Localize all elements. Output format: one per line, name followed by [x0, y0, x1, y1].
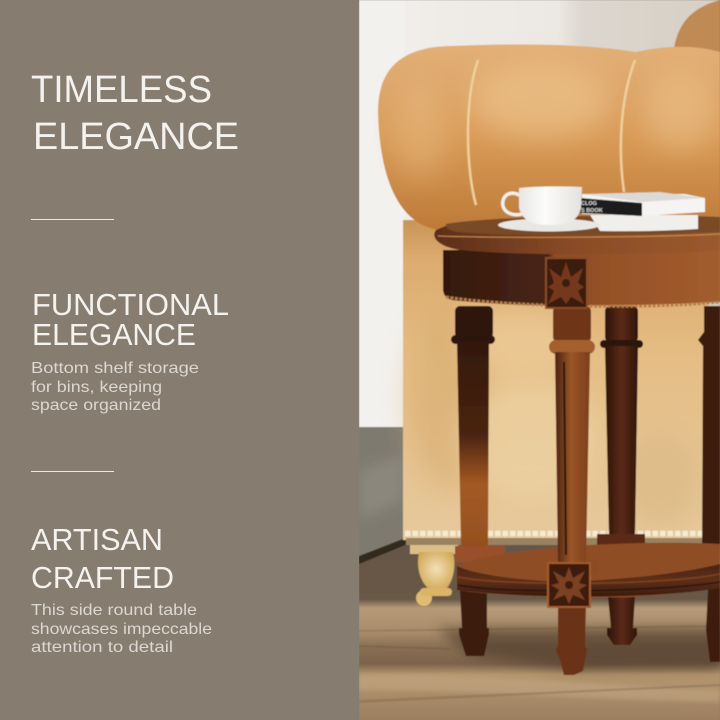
rosette: shelf — [548, 563, 590, 607]
text block: artisan crafted description: This side round table — [31, 602, 197, 619]
heading: artisan crafted — [31, 522, 174, 595]
chair rolled arm — [378, 44, 720, 230]
table: back leg — [597, 306, 645, 645]
heading: functional elegance: ELEGANCE — [32, 317, 196, 352]
text block: artisan crafted description: showcases impeccable — [31, 621, 212, 638]
rosette: apron — [546, 258, 587, 308]
floor — [359, 545, 720, 720]
table: apron — [443, 250, 720, 306]
heading: functional elegance — [32, 287, 229, 352]
heading: timeless elegance — [31, 69, 239, 158]
chair behind — [674, 0, 720, 52]
book cover text — [581, 201, 603, 214]
coffee cup and saucer — [498, 186, 600, 232]
heading: functional elegance: FUNCTIONAL — [32, 287, 229, 322]
table: left leg — [451, 306, 505, 656]
text block: artisan crafted description: attention to detail — [31, 639, 173, 656]
text block: functional elegance description: for bins, keeping — [31, 379, 162, 396]
heading: artisan crafted: CRAFTED — [31, 560, 174, 595]
nailhead trim — [405, 531, 708, 536]
heading: artisan crafted: ARTISAN — [31, 522, 163, 557]
heading: timeless elegance: ELEGANCE — [33, 116, 239, 158]
panel: left text column — [0, 0, 358, 720]
table: front leg — [549, 306, 598, 675]
books — [580, 192, 705, 231]
table floor shadow — [436, 628, 720, 670]
text block: functional elegance description: Bottom shelf storage — [31, 360, 199, 377]
heading: timeless elegance: TIMELESS — [31, 69, 212, 111]
photo: side table beside leather chair — [359, 0, 720, 720]
chair foot — [410, 538, 458, 606]
rug — [359, 427, 408, 564]
text block: artisan crafted description — [31, 602, 212, 656]
table: right leg — [690, 306, 720, 662]
table: lower shelf — [457, 543, 720, 597]
text block: functional elegance description: space organized — [31, 397, 161, 414]
chair front panel — [403, 220, 708, 545]
text block: functional elegance description — [31, 360, 199, 414]
table: round top — [434, 215, 720, 254]
book cover text: S BOOK — [581, 208, 603, 214]
book cover text: CLOG — [581, 201, 597, 207]
